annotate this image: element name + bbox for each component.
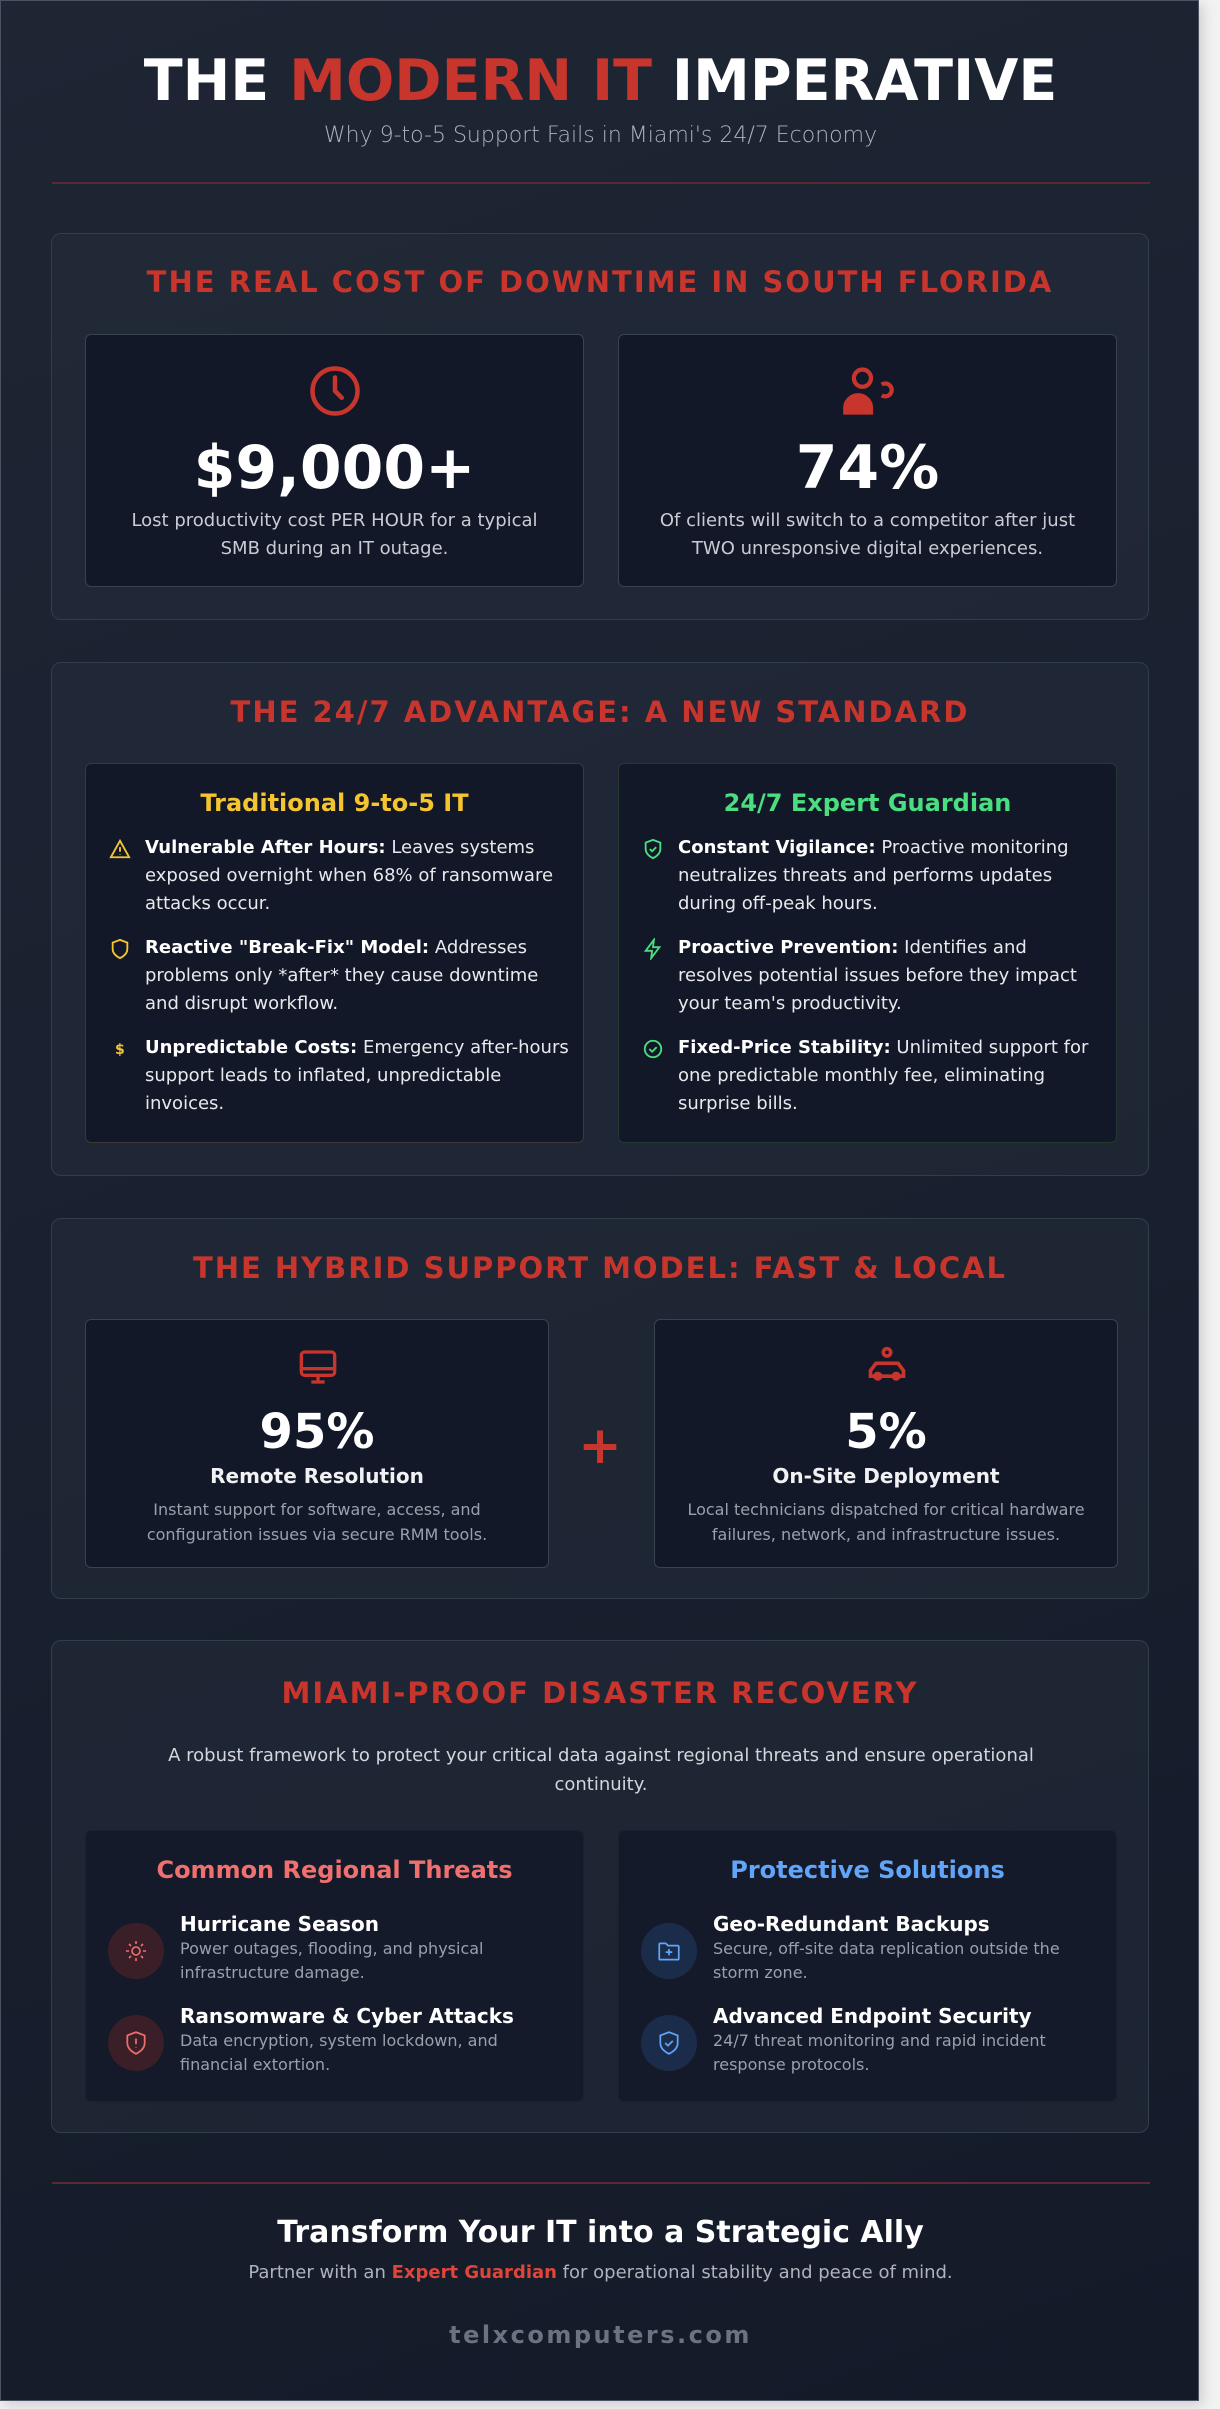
card: remote [85,1319,549,1568]
stat: 74: 74% [796,433,939,503]
stat: 9000: $9,000+ [194,433,475,503]
footer text: Partner with an Expert Guardian for operational stability and peace of mind. [248,2262,953,2283]
text: onsite desc: Local technicians dispatched for critical hardware [687,1500,1085,1519]
heading: cost of downtime: THE REAL COST OF DOWNTIME IN SOUTH FLORIDA [147,265,1053,299]
panel: cost of downtime [51,233,1149,620]
item: backups [641,1912,1060,1982]
item: vulnerable: Vulnerable After Hours: Leaves systems exposed overnight when 68% of ransomware attacks occur. [145,837,553,914]
item: endpoint [641,2004,1046,2074]
footer heading: Transform Your IT into a Strategic Ally [277,2215,924,2250]
text: onsite desc [687,1500,1085,1544]
stat: 95: 95% [260,1404,374,1460]
title: THE MODERN IT IMPERATIVE [144,48,1057,114]
item: prevention: Proactive Prevention: Identifies and resolves potential issues before they impact your team's productivity. [678,937,1077,1014]
text: remote desc [147,1500,487,1544]
card heading: solutions: Protective Solutions [730,1856,1005,1884]
text: remote desc: Instant support for software, access, and [153,1500,481,1519]
website: telxcomputers.com [449,2321,752,2349]
item: hurricane: infrastructure damage. [180,1963,365,1982]
item: backups: Secure, off-site data replication outside the [713,1939,1060,1958]
text: 74 desc: TWO unresponsive digital experiences. [692,538,1043,559]
heading: hybrid model: THE HYBRID SUPPORT MODEL: FAST & LOCAL [193,1251,1007,1285]
text: 74 desc: Of clients will switch to a competitor after just [660,510,1075,531]
item: ransomware [108,2004,514,2074]
text: remote desc: configuration issues via secure RMM tools. [147,1525,487,1544]
item: vigilance: Constant Vigilance: Proactive monitoring neutralizes threats and performs updates during off-peak hours. [678,837,1069,914]
item: ransomware: Data encryption, system lockdown, and [180,2031,498,2050]
icon: sun [108,1923,164,1979]
card: onsite [654,1319,1118,1568]
text: intro: A robust framework to protect your critical data against regional threats and ensure operational continuity. [168,1745,1034,1795]
heading: 24/7 advantage: THE 24/7 ADVANTAGE: A NEW STANDARD [231,695,969,729]
panel: disaster recovery [51,1640,1149,2133]
card: 74 [618,334,1117,587]
item: backups: Geo-Redundant Backups [713,1912,990,1936]
card heading: traditional: Traditional 9-to-5 IT [200,789,469,817]
icon: shield alert [108,2015,164,2071]
icon: monitor [300,1350,336,1384]
label: remote: Remote Resolution [210,1464,424,1488]
card: threats [85,1830,584,2102]
item: ransomware: Ransomware & Cyber Attacks [180,2004,514,2028]
icon: users [843,367,894,415]
panel: hybrid model [51,1218,1149,1599]
icon: car [868,1346,906,1381]
text: onsite desc: failures, network, and infrastructure issues. [712,1525,1060,1544]
card heading: threats: Common Regional Threats [156,1856,513,1884]
text: 9000 desc: SMB during an IT outage. [221,538,448,559]
heading: disaster recovery: MIAMI-PROOF DISASTER RECOVERY [282,1676,918,1710]
item: hurricane [108,1912,483,1982]
card: solutions [618,1830,1117,2102]
text: 9000 desc: Lost productivity cost PER HOUR for a typical [131,510,538,531]
item: endpoint: 24/7 threat monitoring and rapid incident [713,2031,1046,2050]
label: onsite: On-Site Deployment [772,1464,1000,1488]
item: endpoint: Advanced Endpoint Security [713,2004,1032,2028]
text: 9000 desc [131,510,538,559]
item: unpredictable: Unpredictable Costs: Emergency after-hours support leads to inflated, unpredictable invoices. [145,1037,569,1114]
card: traditional [85,763,584,1143]
panel: 24/7 advantage [51,662,1149,1176]
item: endpoint: response protocols. [713,2055,869,2074]
item: hurricane: Hurricane Season [180,1912,379,1936]
item: hurricane: Power outages, flooding, and physical [180,1939,483,1958]
card: 9000 [85,334,584,587]
icon: folder [641,1923,697,1979]
subtitle: Why 9-to-5 Support Fails in Miami's 24/7 Economy [324,123,877,148]
stat: 5: 5% [845,1404,927,1460]
item: fixed price: Fixed-Price Stability: Unlimited support for one predictable monthly fee, eliminating surprise bills. [678,1037,1088,1114]
item: backups: storm zone. [713,1963,808,1982]
card: traditional: $ [115,1042,125,1058]
icon: clock [310,366,360,416]
item: reactive: Reactive "Break-Fix" Model: Addresses problems only *after* they cause downtime and disrupt workflow. [145,937,538,1014]
card heading: guardian: 24/7 Expert Guardian [724,789,1011,817]
text: 74 desc [660,510,1075,559]
item: ransomware: financial extortion. [180,2055,330,2074]
icon: plus: + [578,1416,622,1476]
card: guardian [618,763,1117,1143]
icon: shield check [641,2015,697,2071]
